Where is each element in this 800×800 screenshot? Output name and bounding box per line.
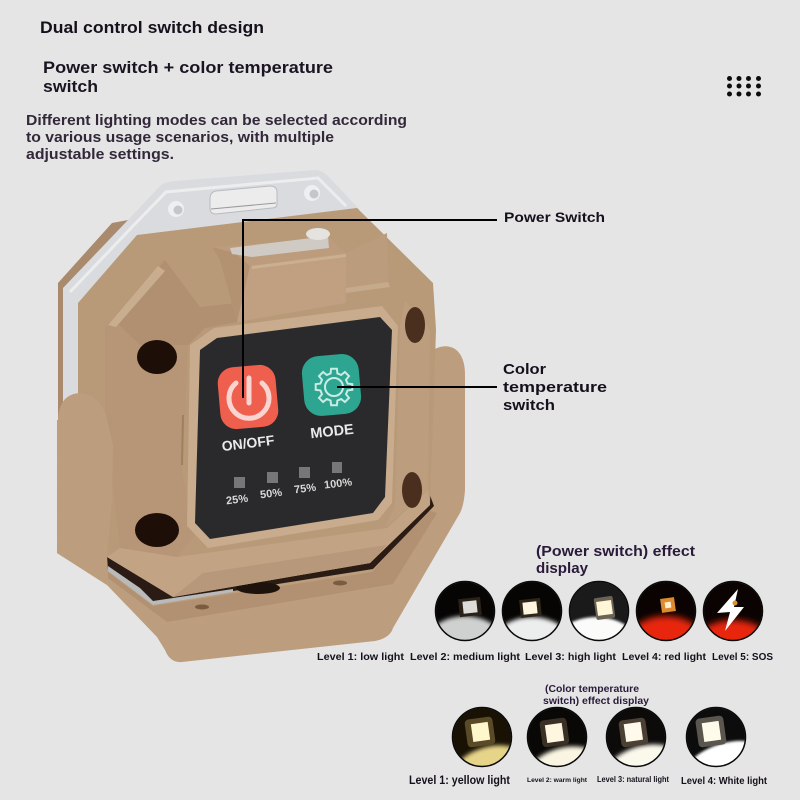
power button bbox=[216, 364, 280, 430]
clip tab bbox=[212, 228, 346, 322]
subtitle: switch bbox=[43, 77, 98, 96]
holes bbox=[135, 307, 425, 547]
power effect labels bbox=[317, 651, 773, 663]
light circle outlines bbox=[452, 708, 746, 766]
power effect labels: Level 1: low light bbox=[317, 651, 405, 663]
stand bracket bbox=[57, 346, 465, 662]
title: Dual control switch design bbox=[40, 18, 264, 37]
heading: color temperature effect display: switch) effect display bbox=[543, 695, 649, 707]
button labels: MODE bbox=[310, 422, 355, 442]
left arm of stand bbox=[57, 393, 113, 585]
subtitle: Power switch + color temperature bbox=[43, 58, 333, 77]
light: level 3 high bbox=[570, 582, 628, 640]
power effect labels: Level 3: high light bbox=[525, 651, 617, 663]
callout: color temperature switch bbox=[337, 361, 607, 414]
callout: color temperature switch: temperature bbox=[503, 379, 607, 396]
power effect labels: Level 2: medium light bbox=[410, 651, 521, 663]
body facets bbox=[105, 233, 430, 597]
heading: color temperature effect display: (Color temperature bbox=[545, 683, 639, 695]
light: level 2 warm bbox=[528, 708, 586, 766]
heading: power switch effect display: display bbox=[536, 560, 589, 577]
light: level 1 low bbox=[436, 582, 494, 640]
light: level 5 SOS bbox=[704, 582, 762, 640]
description text bbox=[26, 112, 407, 163]
white back plate bbox=[63, 170, 360, 410]
description text: Different lighting modes can be selected according bbox=[26, 112, 407, 129]
control panel frame bbox=[187, 306, 398, 548]
callout: color temperature switch: Color bbox=[503, 361, 546, 378]
heading: power switch effect display: (Power switch) effect bbox=[536, 543, 695, 560]
light: level 4 red bbox=[637, 582, 695, 640]
color temperature effect lights bbox=[452, 706, 746, 768]
heading: power switch effect display bbox=[536, 543, 695, 577]
callout: power switch bbox=[243, 209, 605, 398]
battery indicators: 25% bbox=[225, 493, 249, 507]
heading: color temperature effect display bbox=[543, 683, 649, 707]
light: level 2 medium bbox=[503, 582, 561, 640]
light: level 1 yellow bbox=[453, 708, 511, 766]
subtitle bbox=[43, 58, 333, 96]
main body bbox=[78, 208, 436, 597]
color temperature effect labels: Level 2: warm light bbox=[527, 777, 588, 784]
battery indicators bbox=[225, 462, 353, 507]
power effect lights bbox=[434, 580, 764, 642]
color temperature effect labels: Level 4: White light bbox=[681, 775, 767, 787]
light circle outlines bbox=[436, 582, 762, 640]
power effect labels: Level 5: SOS bbox=[712, 651, 773, 663]
control panel bbox=[195, 317, 392, 539]
callout: power switch: Power Switch bbox=[504, 209, 605, 225]
battery indicators: 100% bbox=[323, 476, 353, 492]
color temperature effect labels bbox=[409, 775, 767, 787]
mode button bbox=[300, 353, 363, 417]
button labels: ON/OFF bbox=[221, 432, 276, 454]
device: headlamp product illustration bbox=[57, 170, 465, 662]
base gap and metal strip bbox=[107, 490, 434, 610]
color temperature effect labels: Level 3: natural light bbox=[597, 775, 669, 784]
battery indicators: 50% bbox=[259, 487, 283, 501]
icon: dot grid menu bbox=[727, 76, 761, 96]
power effect labels: Level 4: red light bbox=[622, 651, 707, 663]
light: level 3 natural bbox=[607, 708, 665, 766]
battery indicators: 75% bbox=[293, 482, 317, 496]
light: level 4 white bbox=[687, 708, 745, 766]
description text: to various usage scenarios, with multiple bbox=[26, 129, 334, 146]
button labels bbox=[221, 422, 355, 454]
color temperature effect labels: Level 1: yellow light bbox=[409, 775, 510, 787]
callout: color temperature switch: switch bbox=[503, 397, 555, 414]
rear brown shell bbox=[58, 220, 128, 420]
description text: adjustable settings. bbox=[26, 146, 174, 163]
